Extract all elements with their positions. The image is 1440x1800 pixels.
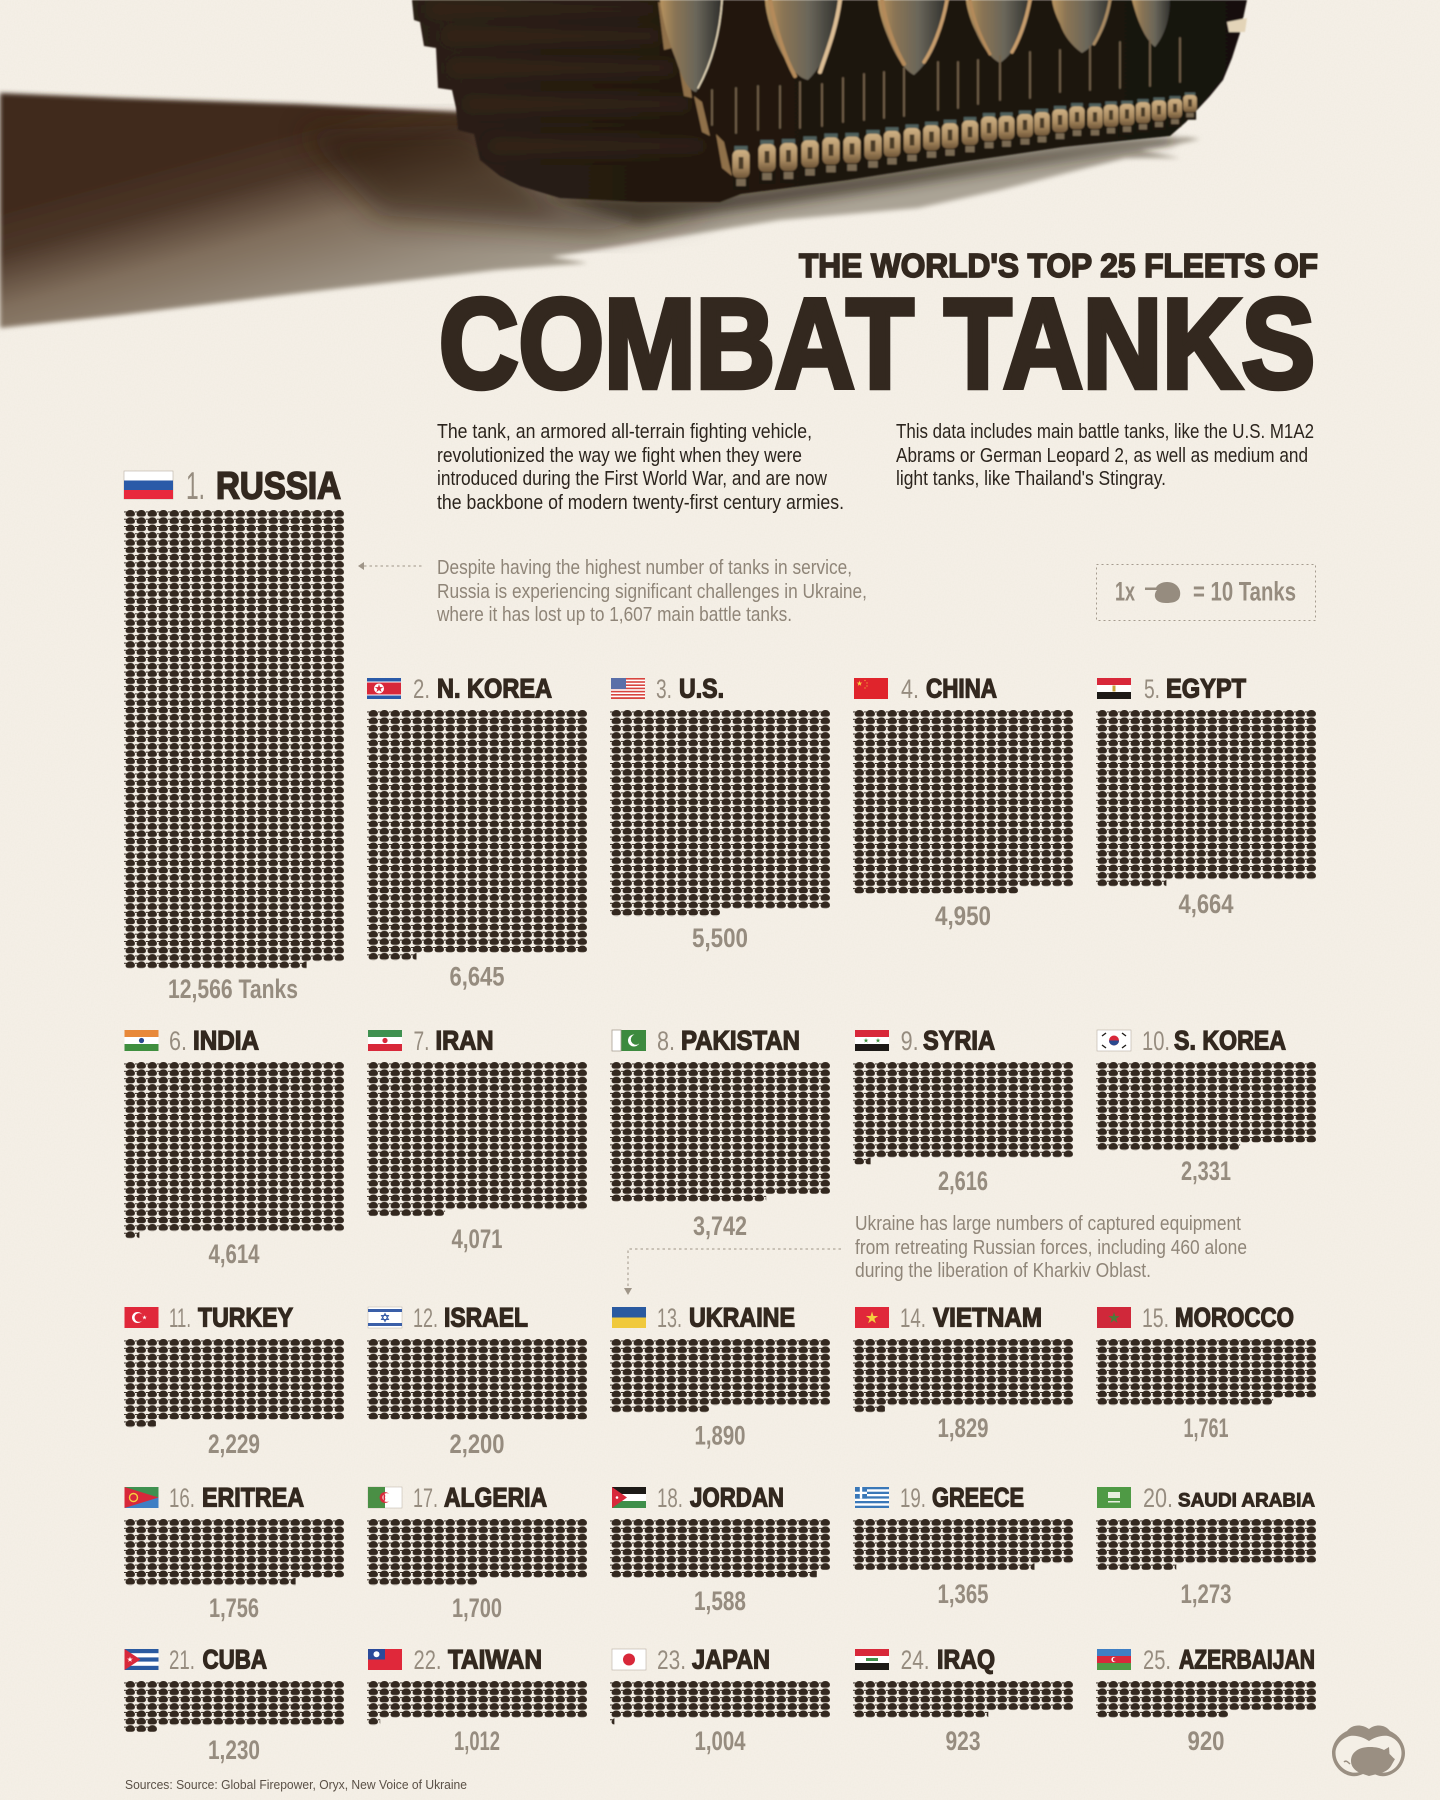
- panel: 14 Vietnam: VIETNAM: [933, 1302, 1042, 1332]
- panel: 21 Cuba: 21.: [169, 1645, 195, 1675]
- panel: 16 Eritrea: [124, 1482, 344, 1623]
- legend: 1x: [1115, 576, 1135, 606]
- panel: 8 Pakistan: 3,742: [693, 1211, 747, 1241]
- panel: 11 Turkey: 11.: [169, 1303, 191, 1333]
- panel: 19 Greece: 1,365: [938, 1579, 988, 1609]
- tank grid: [853, 1339, 1073, 1413]
- intro text left: The tank, an armored all-terrain fighting vehicle,: [437, 421, 812, 443]
- tank grid: [610, 1339, 830, 1413]
- tank grid: [1096, 1339, 1316, 1405]
- panel: 1 Russia: 1.: [186, 465, 205, 508]
- panel: 8 Pakistan: [610, 1026, 830, 1241]
- panel: 25 Azerbaijan: AZERBAIJAN: [1179, 1644, 1315, 1674]
- panel: 8 Pakistan: 8.: [657, 1026, 675, 1056]
- panel: 25 Azerbaijan: 920: [1188, 1726, 1224, 1756]
- panel: 2 N. Korea: 6,645: [450, 962, 504, 992]
- panel: 16 Eritrea: ERITREA: [202, 1482, 304, 1512]
- cast shadow of tank: [0, 93, 1200, 328]
- tank grid: [124, 1519, 344, 1585]
- icon: tank: [1145, 582, 1180, 603]
- panel: 3 U.S.: [610, 674, 830, 953]
- panel: 5 Egypt: 4,664: [1178, 889, 1234, 919]
- intro text left: [437, 421, 844, 514]
- tank grid: [610, 1062, 830, 1202]
- panel: 12 Israel: 12.: [413, 1303, 438, 1333]
- intro text left: the backbone of modern twenty-first century armies.: [437, 492, 844, 514]
- flag: Algeria: [368, 1487, 402, 1508]
- panel: 2 N. Korea: N. KOREA: [437, 674, 552, 704]
- intro text left: introduced during the First World War, and are now: [437, 468, 827, 490]
- tank grid: [124, 510, 344, 969]
- panel: 24 Iraq: 24.: [901, 1645, 930, 1675]
- tank grid: [1096, 1062, 1316, 1150]
- flag: Pakistan: [612, 1030, 646, 1051]
- intro text right: Abrams or German Leopard 2, as well as medium and: [896, 445, 1308, 467]
- tank grid: [367, 1681, 587, 1725]
- flag: Iraq: [855, 1649, 889, 1670]
- flag: Jordan: [612, 1487, 646, 1508]
- tank grid: [1096, 1519, 1316, 1571]
- panel: 20 Saudi Arabia: 20.: [1143, 1483, 1173, 1513]
- panel: 19 Greece: 19.: [900, 1483, 926, 1513]
- panel: 7 Iran: IRAN: [436, 1026, 494, 1056]
- panel: 23 Japan: 23.: [657, 1645, 686, 1675]
- tank grid: [367, 710, 587, 960]
- arrow: callout to Ukraine: [624, 1249, 841, 1295]
- panel: 17 Algeria: 17.: [413, 1483, 438, 1513]
- tank grid: [853, 710, 1073, 894]
- panel: 21 Cuba: CUBA: [202, 1644, 267, 1674]
- panel: 24 Iraq: [853, 1644, 1073, 1756]
- intro text right: This data includes main battle tanks, like the U.S. M1A2: [896, 421, 1314, 443]
- panel: 6 India: INDIA: [193, 1026, 259, 1056]
- tank grid: [367, 1062, 587, 1217]
- tank grid: [1096, 710, 1316, 887]
- arrow: callout to Russia: [358, 562, 422, 570]
- tank grid: [367, 1519, 587, 1585]
- flag: Syria: [855, 1030, 889, 1051]
- flag: Israel: [368, 1307, 402, 1328]
- panel: 4 China: CHINA: [926, 674, 997, 704]
- callout: Ukraine: during the liberation of Kharkiv Oblast.: [855, 1260, 1151, 1282]
- panel: 20 Saudi Arabia: SAUDI ARABIA: [1178, 1490, 1315, 1512]
- flag: Japan: [612, 1649, 646, 1670]
- panel: 18 Jordan: [610, 1482, 830, 1616]
- tank grid: [610, 1519, 830, 1578]
- panel: 9 Syria: 2,616: [938, 1166, 988, 1196]
- tank grid: [853, 1062, 1073, 1165]
- callout: Ukraine: [855, 1213, 1247, 1282]
- panel: 19 Greece: [853, 1482, 1073, 1609]
- flag: Iran: [368, 1030, 402, 1051]
- panel: 3 U.S.: 3.: [656, 674, 672, 704]
- panel: 20 Saudi Arabia: 1,273: [1180, 1579, 1232, 1609]
- panel: 4 China: 4,950: [935, 901, 991, 931]
- flag: China: [854, 678, 888, 699]
- panel: 3 U.S.: U.S.: [679, 674, 724, 704]
- intro text left: revolutionized the way we fight when they were: [437, 445, 802, 467]
- panel: 14 Vietnam: [853, 1302, 1073, 1443]
- panel: 1 Russia: RUSSIA: [216, 466, 341, 508]
- panel: 10 S. Korea: S. KOREA: [1174, 1026, 1286, 1056]
- panel: 15 Morocco: 1,761: [1184, 1413, 1228, 1443]
- panel: 21 Cuba: [124, 1644, 344, 1765]
- panel: 7 Iran: [367, 1026, 587, 1254]
- logo: binoculars with piggy bank: [1332, 1725, 1405, 1776]
- panel: 1 Russia: [124, 465, 344, 1004]
- panel: 22 Taiwan: TAIWAN: [448, 1644, 542, 1674]
- panel: 7 Iran: 7.: [414, 1026, 430, 1056]
- callout: Russia: where it has lost up to 1,607 main battle tanks.: [436, 604, 792, 626]
- tank grid: [124, 1062, 344, 1239]
- panel: 19 Greece: GREECE: [932, 1482, 1024, 1512]
- panel: 14 Vietnam: 1,829: [938, 1413, 988, 1443]
- panel: 17 Algeria: 1,700: [452, 1593, 502, 1623]
- flag: India: [124, 1030, 158, 1051]
- panel: 6 India: [124, 1026, 344, 1269]
- panel: 4 China: 4.: [901, 674, 919, 704]
- callout: Russia: Russia is experiencing significant challenges in Ukraine,: [437, 581, 867, 603]
- panel: 12 Israel: ISRAEL: [444, 1302, 528, 1332]
- panel: 24 Iraq: 923: [946, 1726, 980, 1756]
- panel: 9 Syria: SYRIA: [923, 1026, 995, 1056]
- track block bands: [430, 4, 705, 152]
- panel: 3 U.S.: 5,500: [692, 923, 748, 953]
- panel: 11 Turkey: 2,229: [208, 1429, 260, 1459]
- tank grid: [124, 1339, 344, 1427]
- callout: Russia: [436, 557, 867, 626]
- panel: 9 Syria: 9.: [901, 1026, 919, 1056]
- flag: Azerbaijan: [1097, 1649, 1131, 1670]
- panel: 1 Russia: 12,566 Tanks: [168, 974, 298, 1004]
- panel: 5 Egypt: [1096, 674, 1316, 919]
- tank body group: [404, 0, 1247, 202]
- flag: South Korea: [1097, 1030, 1131, 1051]
- flag: Saudi Arabia: [1097, 1487, 1131, 1508]
- flag: North Korea: [367, 678, 401, 699]
- panel: 13 Ukraine: UKRAINE: [689, 1302, 795, 1332]
- panel: 13 Ukraine: 13.: [657, 1303, 682, 1333]
- panel: 4 China: [853, 674, 1073, 931]
- panel: 23 Japan: [610, 1644, 830, 1756]
- intro text right: [896, 421, 1314, 490]
- panel: 15 Morocco: MOROCCO: [1175, 1302, 1294, 1332]
- panel: 12 Israel: 2,200: [450, 1429, 504, 1459]
- flag: United States: [611, 678, 645, 699]
- panel: 22 Taiwan: [367, 1644, 587, 1756]
- intro text right: light tanks, like Thailand's Stingray.: [896, 468, 1166, 490]
- sources: Sources: Source: Global Firepower, Oryx, New Voice of Ukraine: [125, 1777, 467, 1792]
- flag: Greece: [855, 1487, 889, 1508]
- panel: 22 Taiwan: 1,012: [454, 1726, 500, 1756]
- panel: 5 Egypt: 5.: [1144, 674, 1160, 704]
- panel: 25 Azerbaijan: [1096, 1644, 1316, 1756]
- flag: Morocco: [1097, 1307, 1131, 1328]
- panel: 2 N. Korea: [367, 674, 587, 992]
- panel: 15 Morocco: [1096, 1302, 1316, 1443]
- photo: tank track and cast shadow: [0, 0, 1247, 328]
- main title: COMBAT TANKS: [439, 272, 1315, 414]
- panel: 6 India: 6.: [169, 1026, 187, 1056]
- panel: 7 Iran: 4,071: [452, 1224, 502, 1254]
- panel: 23 Japan: JAPAN: [692, 1644, 770, 1674]
- panel: 20 Saudi Arabia: [1096, 1483, 1316, 1609]
- panel: 18 Jordan: JORDAN: [690, 1482, 784, 1512]
- panel: 17 Algeria: [367, 1482, 587, 1623]
- panel: 25 Azerbaijan: 25.: [1143, 1645, 1171, 1675]
- subtitle: THE WORLD'S TOP 25 FLEETS OF: [799, 247, 1318, 284]
- flag: Cuba: [124, 1649, 158, 1670]
- flag: Turkey: [124, 1307, 158, 1328]
- callout: Russia: Despite having the highest number of tanks in service,: [437, 557, 852, 579]
- panel: 14 Vietnam: 14.: [900, 1303, 926, 1333]
- panel: 10 S. Korea: 2,331: [1181, 1156, 1231, 1186]
- tank grid: [367, 1339, 587, 1420]
- track front highlight: [1227, 18, 1247, 32]
- tank grid: [124, 1681, 344, 1733]
- panel: 17 Algeria: ALGERIA: [444, 1482, 547, 1512]
- legend: [1096, 564, 1316, 620]
- flag: Ukraine: [612, 1307, 646, 1328]
- panel: 16 Eritrea: 1,756: [209, 1593, 259, 1623]
- panel: 12 Israel: [367, 1302, 587, 1459]
- panel: 15 Morocco: 15.: [1142, 1303, 1169, 1333]
- panel: 23 Japan: 1,004: [694, 1726, 746, 1756]
- panel: 10 S. Korea: 10.: [1142, 1026, 1170, 1056]
- panel: 5 Egypt: EGYPT: [1166, 674, 1246, 704]
- tank grid: [853, 1681, 1073, 1718]
- legend: = 10 Tanks: [1193, 576, 1296, 606]
- callout: Ukraine: Ukraine has large numbers of captured equipment: [855, 1213, 1241, 1235]
- panel: 18 Jordan: 18.: [657, 1483, 683, 1513]
- panel: 13 Ukraine: [610, 1302, 830, 1450]
- track edge highlights: [658, 2, 732, 176]
- tank grid: [610, 710, 830, 916]
- title: [439, 247, 1318, 414]
- tank track silhouette: [404, 0, 1247, 202]
- panel: 11 Turkey: [124, 1302, 344, 1459]
- panel: 6 India: 4,614: [208, 1239, 260, 1269]
- panel: 11 Turkey: TURKEY: [198, 1302, 293, 1332]
- tank grid: [853, 1519, 1073, 1571]
- tank grid: [610, 1681, 830, 1725]
- panel: 22 Taiwan: 22.: [414, 1645, 442, 1675]
- road wheels: [660, 0, 1170, 92]
- panel: 8 Pakistan: PAKISTAN: [681, 1026, 800, 1056]
- track guide teeth: [712, 38, 1180, 133]
- track link pads: [732, 92, 1197, 190]
- panel: 9 Syria: [853, 1026, 1073, 1196]
- panel: 2 N. Korea: 2.: [413, 674, 430, 704]
- flag: Russia: [124, 471, 173, 499]
- flag: Eritrea: [124, 1487, 158, 1508]
- panel: 18 Jordan: 1,588: [694, 1586, 746, 1616]
- panel: 21 Cuba: 1,230: [208, 1735, 260, 1765]
- tank grid: [1096, 1681, 1316, 1718]
- panel: 10 S. Korea: [1096, 1026, 1316, 1186]
- flag: Taiwan: [368, 1649, 402, 1670]
- panel: 16 Eritrea: 16.: [169, 1483, 195, 1513]
- flag: Egypt: [1097, 678, 1131, 699]
- panel: 13 Ukraine: 1,890: [694, 1420, 746, 1450]
- panel: 24 Iraq: IRAQ: [937, 1644, 995, 1674]
- callout: Ukraine: from retreating Russian forces, including 460 alone: [855, 1237, 1247, 1259]
- flag: Vietnam: [855, 1307, 889, 1328]
